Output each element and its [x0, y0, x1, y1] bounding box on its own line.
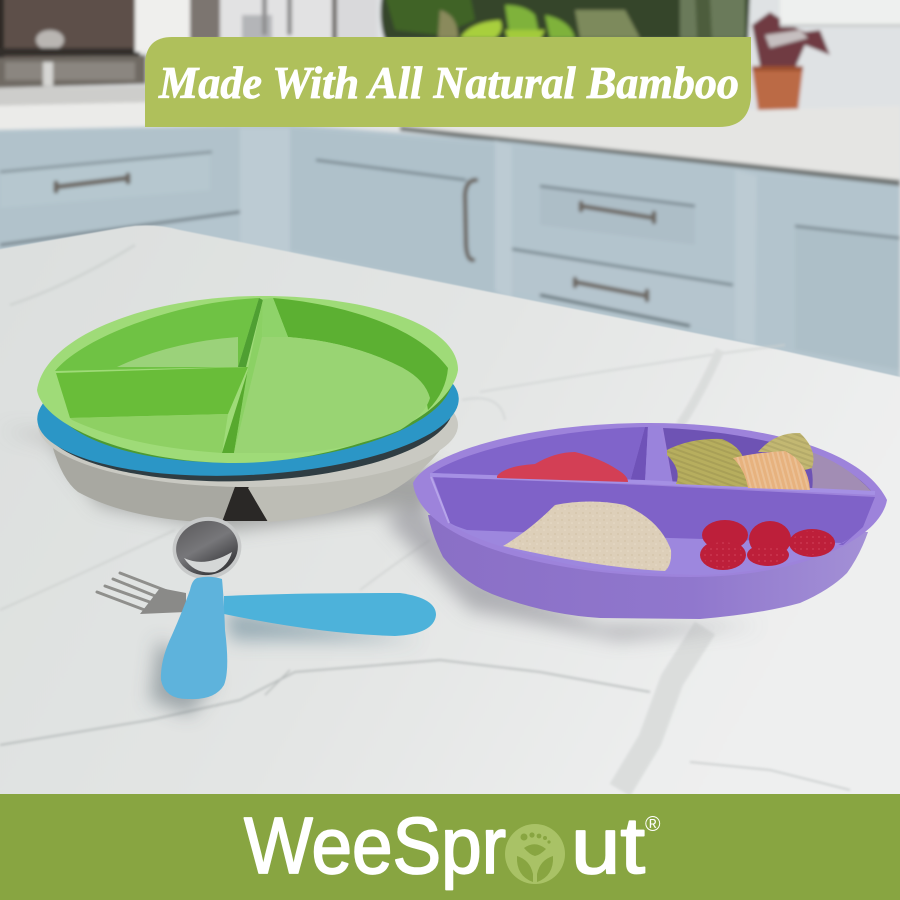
front compartment wall — [433, 477, 875, 545]
plate underside — [47, 300, 457, 472]
icon: footprint sprout circle — [505, 824, 565, 884]
food: puffed snacks — [667, 433, 814, 490]
lower-left compartment wall — [56, 367, 248, 418]
green plate — [37, 296, 458, 472]
spoon handle — [161, 577, 227, 699]
upper-left compartment floor — [117, 337, 238, 367]
lower-left compartment floor — [70, 414, 228, 453]
plate body — [428, 515, 868, 619]
logo: WeeSprout: ut — [571, 801, 645, 890]
fork — [97, 573, 436, 636]
center divider — [645, 426, 672, 484]
fork handle — [224, 593, 436, 636]
back-right compartment reflection — [805, 450, 873, 493]
back-left compartment — [432, 427, 645, 482]
horizontal divider — [430, 475, 875, 493]
icon: wall and toaster — [135, 0, 377, 52]
registered mark: ® — [645, 813, 661, 836]
spoon — [161, 511, 246, 699]
title text: Made With All Natural Bamboo — [158, 58, 739, 108]
blue plate — [34, 332, 462, 488]
purple plate — [413, 423, 887, 619]
icon: espresso machine — [0, 0, 146, 88]
right compartment wall — [273, 298, 448, 410]
marble countertop — [0, 225, 900, 800]
footer band — [0, 794, 900, 900]
icon: cabinet handles — [56, 175, 654, 300]
shadows beneath objects — [0, 430, 760, 715]
upper-left compartment wall — [55, 298, 259, 371]
back-right compartment — [663, 428, 873, 493]
rim — [413, 423, 887, 577]
front compartment floor — [450, 524, 857, 575]
background: upper wall band — [780, 0, 900, 27]
rim — [37, 296, 458, 463]
right compartment floor — [234, 337, 430, 453]
background: blurred kitchen — [0, 0, 900, 400]
plate stack — [34, 296, 462, 522]
background: cabinets — [0, 124, 900, 400]
icon: potted plants — [381, 0, 830, 110]
marble veins — [0, 245, 850, 790]
background: back counters — [0, 85, 900, 187]
food: oatmeal — [503, 502, 671, 571]
food: strawberry puree — [497, 452, 628, 482]
title banner — [145, 37, 751, 127]
fork and spoon — [97, 511, 436, 699]
logo: WeeSprout — [244, 801, 661, 890]
logo: WeeSprout: WeeSpr — [244, 801, 506, 890]
food: raspberries — [700, 520, 835, 570]
gray plate — [38, 363, 458, 522]
